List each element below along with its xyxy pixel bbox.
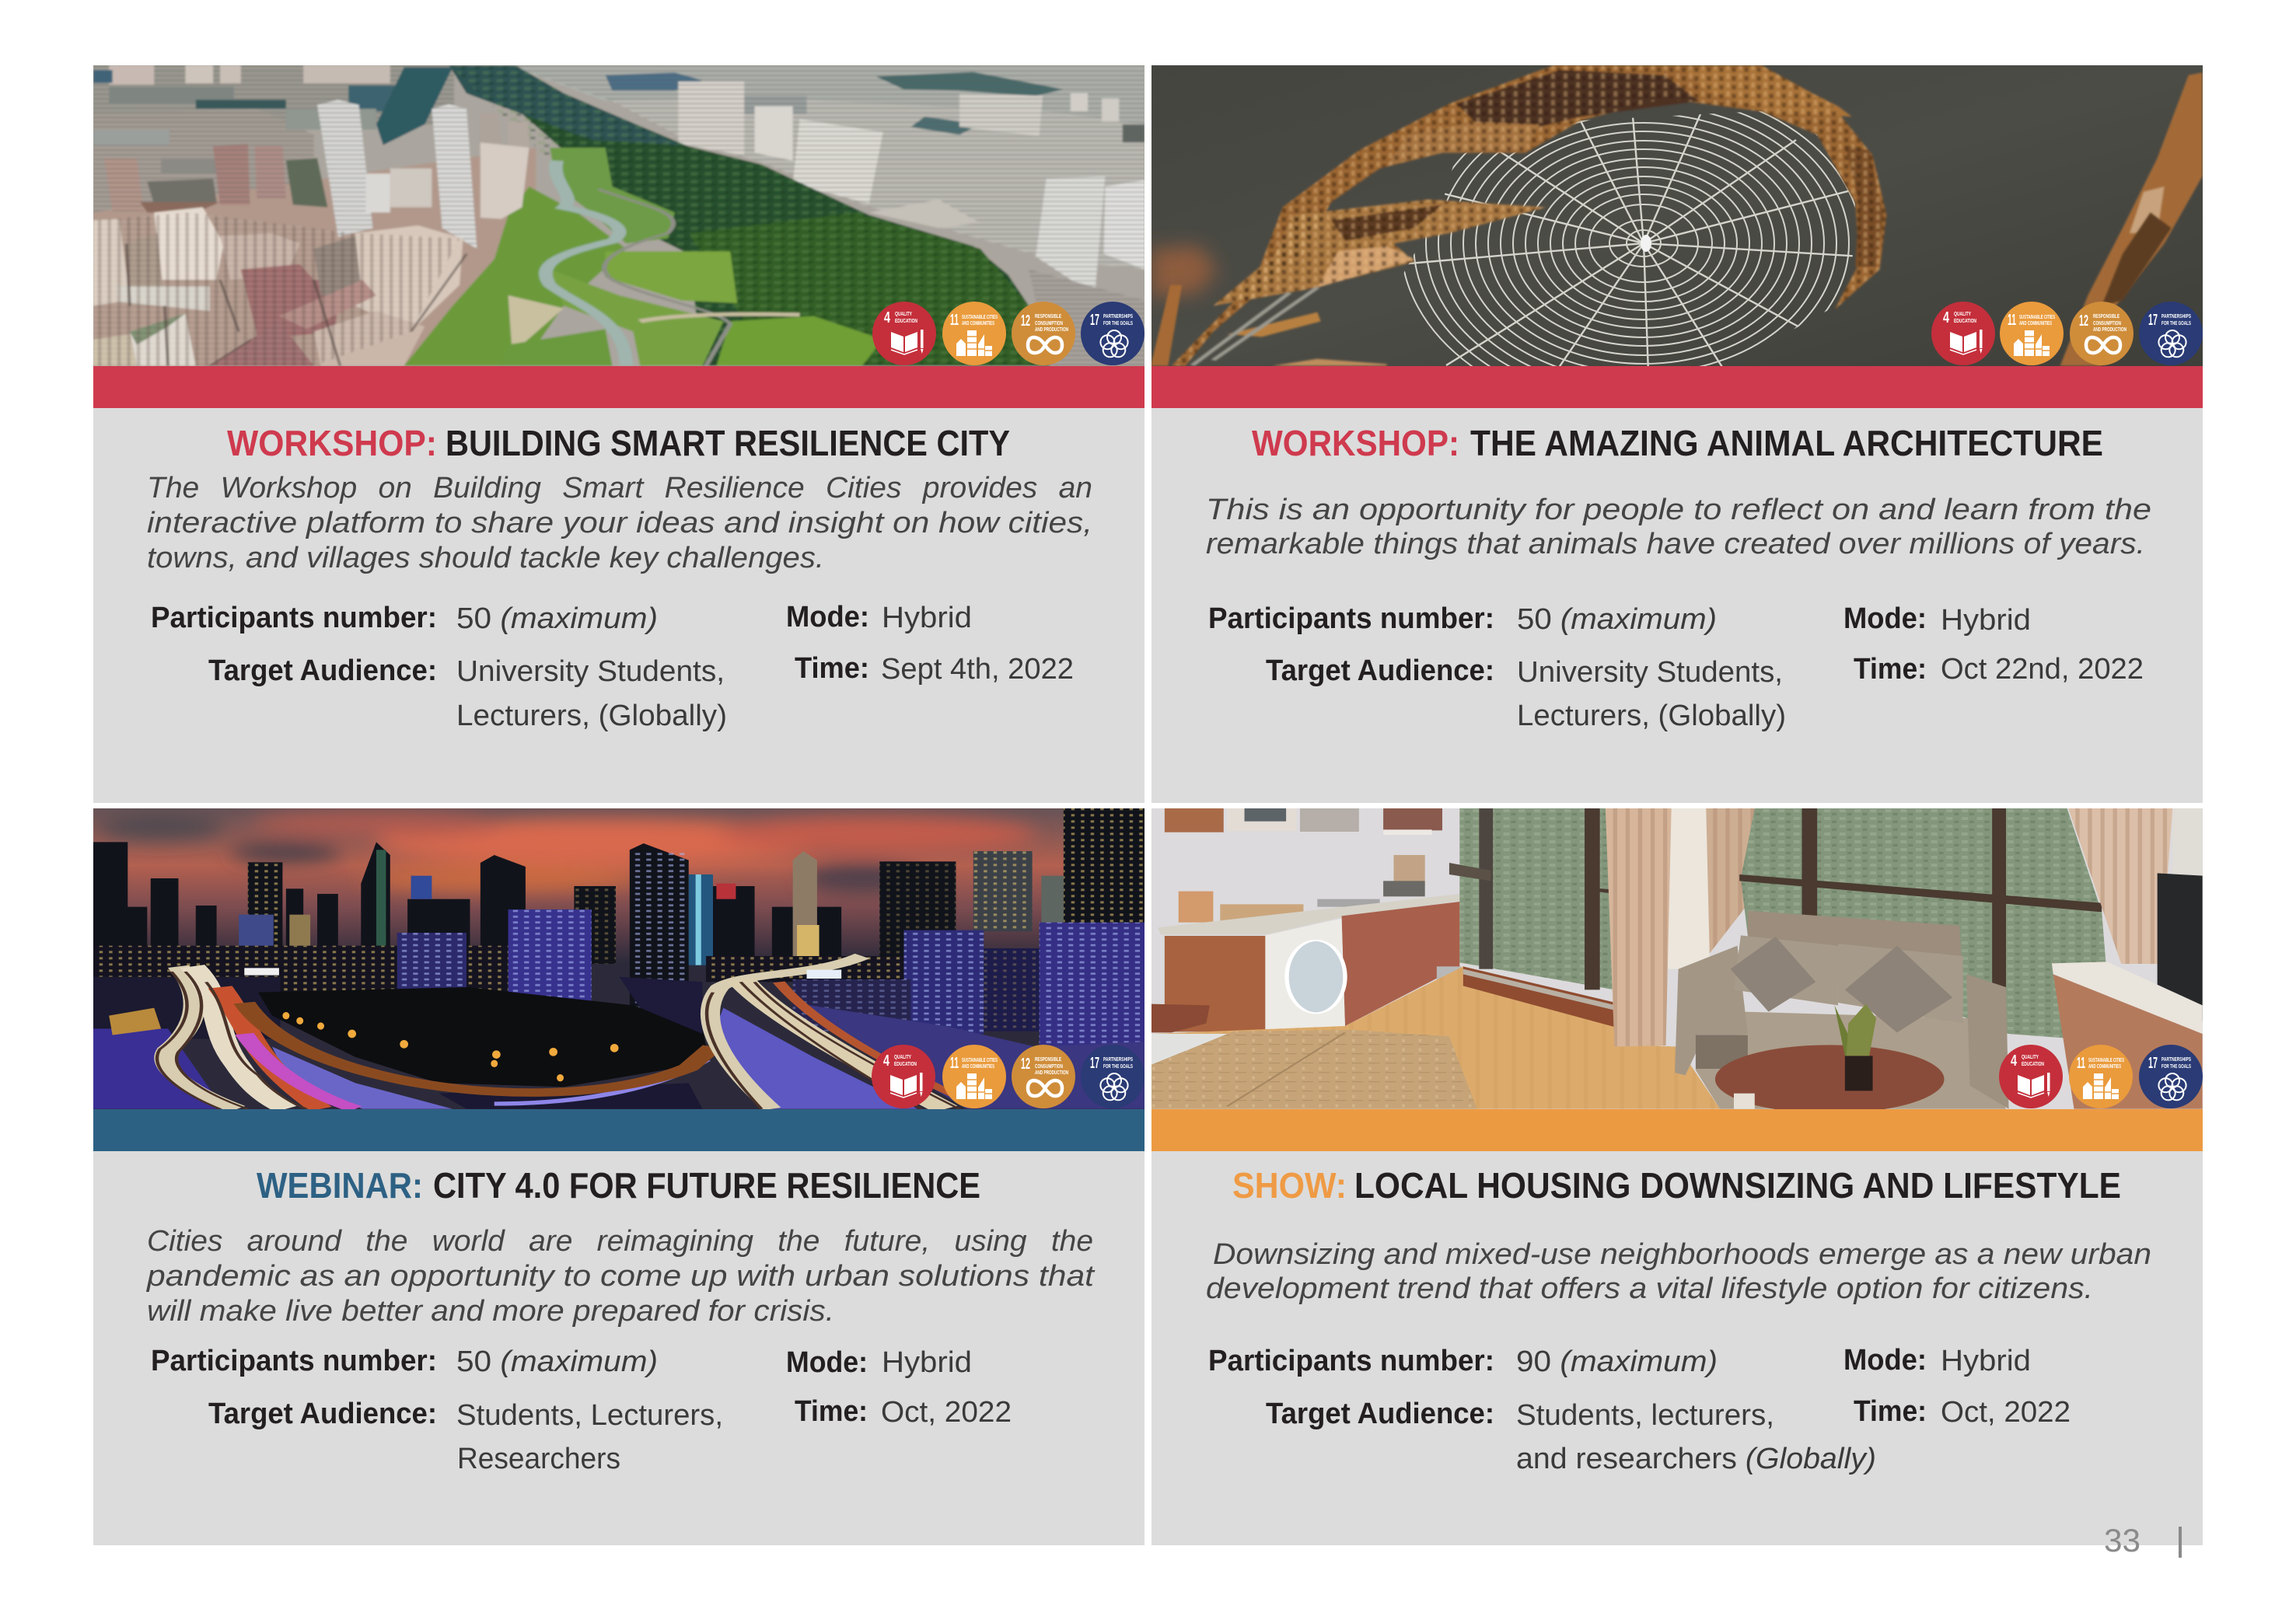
value: time: Oct 22nd, 2022 [1941,653,2144,686]
icon: SDG 12 responsible consumption badge: RESPONSIBLE [2093,314,2120,319]
coffee table [1715,1045,1945,1113]
icon: SDG 11 sustainable cities badge: SUSTAINABLE CITIES [2088,1058,2124,1063]
heading: THE AMAZING ANIMAL ARCHITECTURE [1470,423,2103,463]
kitchen [1165,808,1224,832]
page number [2104,1522,2182,1558]
icon: SDG 17 partnerships badge: FOR THE GOALS [1103,1064,1133,1070]
icon: SDG 11 sustainable cities badge: AND COMMUNITIES [962,1064,994,1070]
heading: WEBINAR: [257,1165,423,1206]
value: time: Sept 4th, 2022 [881,653,1074,686]
icon: SDG 4 quality education badge [1931,302,1995,365]
spider web [1404,111,1855,366]
value: mode: Hybrid [1941,604,2031,637]
label: time: Time: [795,652,869,685]
value: participants: 50 (maximum) [456,602,658,635]
label: target audience: Target Audience: [1266,1398,1494,1430]
value: target audience: Lecturers, (Globally) [1517,700,1786,732]
sofa [1748,911,1963,982]
icon: SDG 11 sustainable cities badge: SUSTAINABLE CITIES [2019,315,2055,320]
label: mode: Mode: [1843,602,1927,635]
value: target audience: Lecturers, (Globally) [456,700,727,732]
forest [522,113,1028,366]
icon: SDG 17 partnerships badge [1081,1045,1145,1108]
icon: SDG 17 partnerships badge: FOR THE GOALS [2161,1064,2191,1070]
heading [227,423,1010,463]
icon: SDG 11 sustainable cities badge [942,1045,1006,1108]
band: red colour bar [1151,366,2203,408]
photo: compact apartment interior [1151,806,2206,1113]
band: red colour bar [93,366,1145,408]
icon: SDG 11 sustainable cities badge: 11 [950,1055,959,1072]
value: participants: 50 (maximum) [456,1346,658,1378]
value: target audience: Researchers [457,1443,620,1475]
icon: SDG 4 quality education badge: EDUCATION [2022,1062,2044,1067]
icon: SDG 11 sustainable cities badge [942,302,1006,365]
icon: SDG 11 sustainable cities badge: 11 [2077,1055,2085,1072]
icon: SDG 12 responsible consumption badge: AND PRODUCTION [2093,327,2127,333]
floor [1151,966,1720,1109]
description text [146,1225,1096,1328]
icon: SDG 4 quality education badge: 4 [884,309,891,326]
icon: SDG 12 responsible consumption badge [1012,302,1075,365]
icon: SDG 12 responsible consumption badge: 12 [1021,312,1030,330]
icon: SDG 12 responsible consumption badge [1012,1045,1075,1108]
icon: SDG 11 sustainable cities badge: AND COMMUNITIES [2088,1064,2121,1070]
icon: SDG 4 quality education badge: QUALITY [894,1055,911,1060]
icon: SDG 12 responsible consumption badge: AND PRODUCTION [1035,1070,1068,1076]
description text: The Workshop on Building Smart Resilience Cities provides an [147,472,1092,504]
heading: WORKSHOP: [227,423,437,463]
icon: SDG 11 sustainable cities badge: SUSTAINABLE CITIES [962,1058,998,1063]
description text: development trend that offers a vital lifestyle option for citizens. [1206,1272,2093,1305]
television [2158,873,2203,1021]
description text [1206,494,2151,560]
icon: SDG 11 sustainable cities badge: SUSTAINABLE CITIES [962,315,998,320]
right side city [614,99,1145,269]
icon: SDG 4 quality education badge: EDUCATION [895,319,917,324]
sideboard [2053,974,2203,1109]
value: time: Oct, 2022 [881,1396,1012,1429]
icon: SDG 12 responsible consumption badge: AND PRODUCTION [1035,327,1068,333]
icon: SDG 4 quality education badge: QUALITY [2022,1055,2039,1060]
band: orange colour bar [1151,1109,2203,1151]
left towers [317,99,372,237]
icon: SDG 11 sustainable cities badge: 11 [950,312,959,329]
label: participants number: Participants number: [1208,602,1494,635]
label: participants number: Participants number: [151,602,437,634]
value: mode: Hybrid [882,602,972,634]
photo: night skyline with light-trail highways [93,808,1145,1109]
heading: CITY 4.0 FOR FUTURE RESILIENCE [433,1165,980,1206]
description text: This is an opportunity for people to reflect on and learn from the [1206,494,2151,526]
icon: SDG 17 partnerships badge: PARTNERSHIPS [2161,314,2191,319]
icon: SDG 17 partnerships badge: FOR THE GOALS [1103,321,1133,326]
panel background [93,65,1145,803]
description text [1206,1238,2151,1305]
icon: SDG 12 responsible consumption badge: CONSUMPTION [1035,321,1063,326]
description text: Downsizing and mixed-use neighborhoods emerge as a new urban [1213,1238,2151,1271]
icon: SDG 12 responsible consumption badge: CONSUMPTION [1035,1064,1063,1070]
icon: SDG 11 sustainable cities badge: AND COMMUNITIES [962,321,994,326]
icon: SDG 11 sustainable cities badge [2000,302,2064,365]
icon: SDG 4 quality education badge [872,1045,935,1108]
icon: SDG 17 partnerships badge: FOR THE GOALS [2161,321,2191,326]
panel: webinar city 4.0 [78,801,1189,1545]
photo: aerial view of city and river park [78,62,1189,373]
panel: workshop building smart resilience city [78,62,1189,803]
right towers [1036,176,1105,295]
label: time: Time: [1854,653,1927,686]
description text: towns, and villages should tackle key challenges. [147,542,824,574]
icon: SDG 11 sustainable cities badge: 11 [2008,312,2016,329]
icon: SDG 4 quality education badge [872,302,936,365]
lower area [93,977,281,1039]
grass [550,148,675,243]
heading: WORKSHOP: [1252,423,1459,463]
description text [147,472,1092,574]
icon: SDG 11 sustainable cities badge [2069,1045,2133,1108]
bed [1151,1034,1227,1067]
lower left blocks [154,208,224,280]
value: participants: 50 (maximum) [1517,603,1717,636]
page number: 33 [2104,1522,2140,1558]
grass stalk arc [1151,65,1886,366]
icon: SDG 12 responsible consumption badge: 12 [1021,1056,1030,1073]
value: target audience: Students, Lecturers, [456,1399,723,1432]
value: mode: Hybrid [882,1346,972,1379]
photo: spider web on grass stalks [1151,65,2203,366]
heading: LOCAL HOUSING DOWNSIZING AND LIFESTYLE [1354,1165,2121,1206]
label: mode: Mode: [786,1346,868,1379]
icon: SDG 17 partnerships badge: 17 [1090,1055,1099,1072]
value: target audience: Students, lecturers, [1516,1399,1774,1432]
heading: SHOW: [1232,1165,1347,1206]
heading: BUILDING SMART RESILIENCE CITY [446,423,1010,463]
icon: SDG 4 quality education badge: EDUCATION [1954,319,1976,324]
window left [1459,808,1637,993]
icon: SDG 17 partnerships badge: PARTNERSHIPS [2161,1057,2191,1063]
value: target audience [1517,656,1786,732]
icon: SDG 12 responsible consumption badge [2070,302,2133,365]
icon: SDG 11 sustainable cities badge: AND COMMUNITIES [2019,321,2052,326]
value: target audience: University Students, [456,655,725,688]
icon: SDG 12 responsible consumption badge: RESPONSIBLE [1035,1057,1061,1063]
panel background [1151,808,2203,1545]
description text: interactive platform to share your ideas and insight on how cities, [147,507,1092,539]
icon: SDG 4 quality education badge: EDUCATION [894,1062,917,1067]
label: participants number: Participants number: [151,1345,437,1377]
description text: pandemic as an opportunity to come up with urban solutions that [146,1260,1096,1293]
value: target audience [1516,1399,1876,1475]
panel background [93,808,1145,1545]
blue violet buildings [508,909,592,1003]
light trails [157,956,973,1109]
value: mode: Hybrid [1941,1345,2031,1377]
street lights [282,1012,619,1081]
description text: remarkable things that animals have created over millions of years. [1206,528,2145,560]
panel: show local housing downsizing [1151,806,2206,1545]
icon: SDG 17 partnerships badge [1081,302,1145,365]
icon: SDG 17 partnerships badge [2139,302,2203,365]
band: blue colour bar [93,1109,1145,1151]
icon: SDG 4 quality education badge: 4 [883,1052,890,1070]
icon: SDG 4 quality education badge: 4 [1943,309,1950,326]
icon: SDG 4 quality education badge: QUALITY [895,312,912,317]
value: target audience: and researchers (Globally) [1516,1443,1876,1475]
panel: workshop amazing animal architecture [1151,65,2203,803]
curtain right [2068,808,2172,964]
label: target audience: Target Audience: [1266,654,1494,687]
label: mode: Mode: [1843,1344,1927,1377]
label: time: Time: [795,1395,868,1428]
label: target audience: Target Audience: [208,1398,437,1430]
icon: SDG 17 partnerships badge: PARTNERSHIPS [1103,1057,1133,1063]
icon: SDG 4 quality education badge: QUALITY [1954,312,1971,317]
value: target audience [456,1399,723,1475]
value: participants: 90 (maximum) [1516,1346,1718,1378]
wall and curtains [1668,808,1710,969]
value: target audience: University Students, [1517,656,1783,689]
icon: SDG 17 partnerships badge: PARTNERSHIPS [1103,314,1133,319]
icon: SDG 17 partnerships badge: 17 [1090,312,1099,329]
icon: SDG 12 responsible consumption badge: CONSUMPTION [2093,321,2121,326]
icon: SDG 4 quality education badge [1999,1045,2063,1108]
icon: SDG 17 partnerships badge [2139,1045,2203,1108]
low city band [93,946,523,993]
panel background [1151,65,2203,803]
label: target audience: Target Audience: [208,654,437,687]
value: target audience [456,655,727,732]
label: participants number: Participants number: [1208,1345,1494,1377]
icon: SDG 12 responsible consumption badge: 12 [2079,312,2088,330]
icon: SDG 4 quality education badge: 4 [2011,1052,2018,1070]
icon: SDG 17 partnerships badge: 17 [2148,1055,2158,1072]
icon: SDG 12 responsible consumption badge: RESPONSIBLE [1035,314,1061,319]
description text: will make live better and more prepared for crisis. [147,1295,834,1328]
label: time: Time: [1854,1395,1927,1428]
description text: Cities around the world are reimagining the future, using the [147,1225,1093,1258]
value: time: Oct, 2022 [1941,1396,2071,1429]
label: mode: Mode: [786,601,869,633]
icon: SDG 17 partnerships badge: 17 [2148,312,2158,329]
window right [1741,808,2113,1042]
